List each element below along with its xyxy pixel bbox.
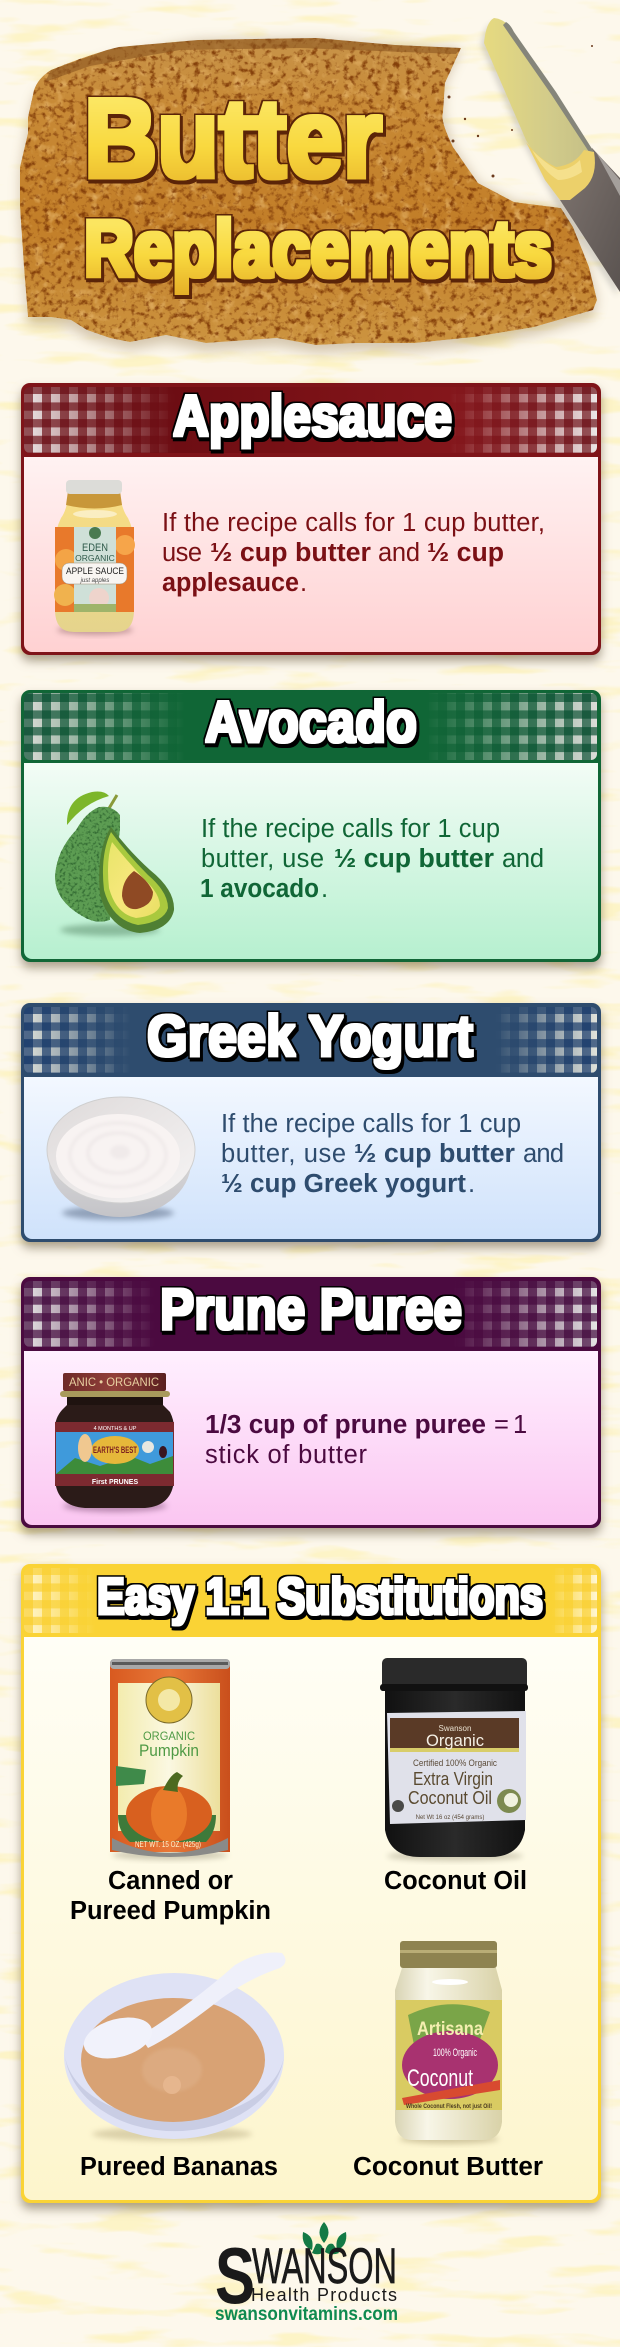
text: avocado instructions: 1 avocado [200, 875, 319, 903]
label: canned or pureed pumpkin: Canned or [108, 1867, 233, 1895]
heading: Applesauce: Applesauce [173, 384, 452, 449]
text: greek yogurt instructions: . [468, 1170, 475, 1198]
icon: canned pumpkin: Pumpkin [139, 1741, 199, 1760]
label: coconut oil: Coconut Oil [384, 1867, 527, 1895]
title: Butter Replacements: Butter [84, 76, 382, 201]
text: greek yogurt instructions: ½ cup Greek yogurt [221, 1170, 467, 1198]
icon: applesauce jar: APPLE SAUCE [66, 566, 124, 576]
text: prune puree instructions: 1 [513, 1411, 527, 1439]
panel: applesauce [21, 383, 601, 655]
icon: applesauce jar: ORGANIC [75, 553, 115, 563]
icon: prune puree jar: EARTH'S BEST [93, 1445, 137, 1455]
logo: Swanson Health Products: S [215, 2231, 255, 2320]
text: applesauce instructions: use [162, 539, 202, 567]
icon: coconut oil jar: Swanson [439, 1724, 471, 1733]
text: applesauce instructions [162, 509, 545, 597]
icon: coconut oil jar: Organic [426, 1731, 484, 1750]
logo: Swanson Health Products: Health Products [251, 2285, 397, 2305]
icon: prune puree jar: ANIC • ORGANIC [69, 1377, 159, 1389]
panel: prune puree [21, 1277, 601, 1528]
text: prune puree instructions: stick of butter [205, 1441, 368, 1469]
icon: bowl of pureed bananas [64, 1952, 286, 2141]
title: Butter Replacements: Replacements [84, 204, 552, 293]
text: applesauce instructions: ½ cup butter [210, 539, 371, 567]
icon: coconut butter jar: Artisana [417, 2019, 483, 2040]
text: prune puree instructions: = [494, 1411, 509, 1439]
knife [481, 18, 620, 296]
icon: coconut butter jar: Whole Coconut Flesh, not just Oil! [406, 2103, 492, 2110]
icon: coconut butter jar: Coconut [407, 2065, 473, 2092]
text: greek yogurt instructions: and [523, 1140, 564, 1168]
icon: bowl of yogurt [47, 1097, 195, 1220]
heading: Greek Yogurt: Greek Yogurt [147, 1004, 473, 1069]
icon: coconut oil jar: Net Wt 16 oz (454 grams) [416, 1815, 484, 1821]
text: applesauce instructions: If the recipe calls for 1 cup butter, [162, 509, 545, 537]
icon: coconut butter jar: 100% Organic [433, 2047, 477, 2059]
icon: canned pumpkin [110, 1659, 230, 1860]
panel: avocado [21, 690, 601, 962]
text: avocado instructions: ½ cup butter [334, 845, 494, 873]
icon: applesauce jar: EDEN [82, 542, 108, 554]
text: greek yogurt instructions: ½ cup butter [354, 1140, 515, 1168]
text: avocado instructions: . [321, 875, 328, 903]
icon: prune puree jar [55, 1373, 174, 1512]
text: applesauce instructions: and [378, 539, 420, 567]
text: avocado instructions [200, 815, 544, 903]
text: avocado instructions: and [502, 845, 544, 873]
logo: Swanson Health Products: WANSON [252, 2238, 397, 2294]
text: greek yogurt instructions: If the recipe calls for 1 cup [221, 1110, 521, 1138]
title: Butter Replacements [84, 76, 552, 293]
icon: coconut oil jar [380, 1658, 528, 1861]
icon: prune puree jar: First PRUNES [92, 1479, 138, 1486]
icon: coconut oil jar: Certified 100% Organic [413, 1758, 497, 1769]
panel: easy 1:1 substitutions [21, 1564, 601, 2203]
text: applesauce instructions: applesauce [162, 569, 299, 597]
label: canned or pureed pumpkin [70, 1867, 271, 1925]
label: coconut butter: Coconut Butter [353, 2153, 543, 2181]
label: canned or pureed pumpkin: Pureed Pumpkin [70, 1897, 271, 1925]
crumbs [448, 45, 593, 178]
icon: applesauce jar: just apples [80, 578, 109, 584]
logo: Swanson Health Products [215, 2222, 398, 2325]
icon: prune puree jar: 4 MONTHS & UP [94, 1426, 137, 1432]
panel: greek yogurt [21, 1003, 601, 1242]
heading: Prune Puree: Prune Puree [160, 1277, 462, 1342]
label: pureed bananas: Pureed Bananas [80, 2153, 278, 2181]
icon: coconut oil jar: Extra Virgin [413, 1769, 493, 1789]
text: avocado instructions: If the recipe calls for 1 cup [201, 815, 500, 843]
text: applesauce instructions: . [300, 569, 307, 597]
text: avocado instructions: butter, use [201, 845, 324, 873]
icon: canned pumpkin: ORGANIC [143, 1731, 195, 1743]
icon: leaves [303, 2222, 346, 2254]
icon: canned pumpkin: NET WT. 15 OZ. (425g) [135, 1840, 201, 1849]
text: greek yogurt instructions [221, 1110, 564, 1198]
text: greek yogurt instructions: butter, use [221, 1140, 346, 1168]
icon: avocado [55, 792, 174, 936]
text: prune puree instructions: 1/3 cup of prune puree [205, 1411, 486, 1439]
logo: Swanson Health Products: swansonvitamins.com [215, 2304, 398, 2325]
heading: Avocado: Avocado [205, 690, 417, 755]
icon: coconut butter jar [395, 1941, 502, 2144]
icon: applesauce jar [54, 480, 135, 635]
text: applesauce instructions: ½ cup [427, 539, 504, 567]
icon: coconut oil jar: Coconut Oil [408, 1788, 492, 1808]
hero: toast slice and knife [20, 18, 620, 353]
text: prune puree instructions [205, 1411, 527, 1469]
